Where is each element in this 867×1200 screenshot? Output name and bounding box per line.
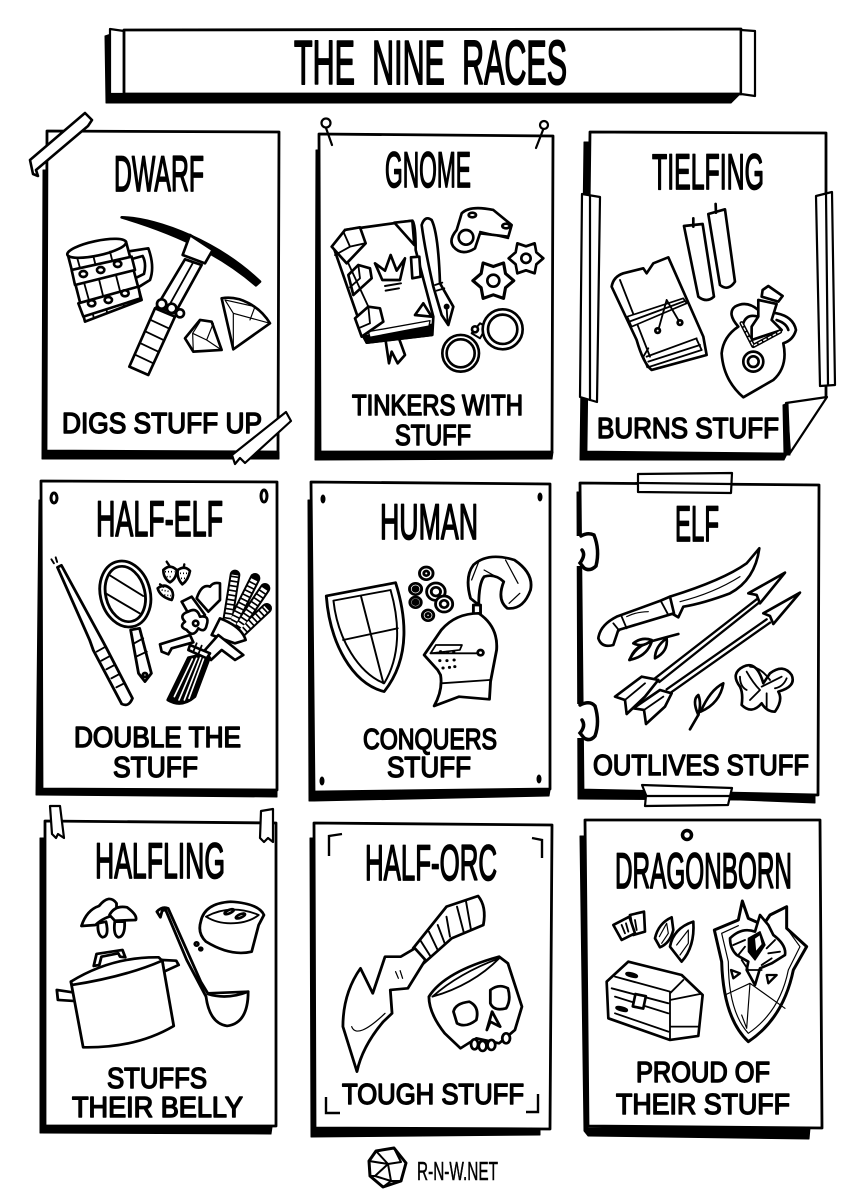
caption: stuffs their belly: STUFFS (107, 1063, 207, 1095)
icon: d20 (369, 1148, 406, 1187)
icon: dragon shield (714, 901, 807, 1042)
icons: runes, gems, chest (607, 912, 703, 1040)
caption: double the stuff: DOUBLE THE (74, 722, 241, 754)
caption: conquers stuff: STUFF (387, 752, 471, 784)
icons: book, pen (332, 218, 453, 363)
panel: tielfing (580, 132, 835, 460)
icons: wand, mirror (51, 557, 157, 705)
caption: double the stuff: STUFF (113, 752, 198, 784)
caption: stuffs their belly: THEIR BELLY (72, 1092, 243, 1124)
pin: left (322, 118, 332, 145)
logo: d20 and site name (369, 1148, 498, 1187)
caption: tough stuff: TOUGH STUFF (342, 1079, 524, 1111)
tabs (50, 806, 273, 842)
tape strips (580, 192, 835, 402)
hole (682, 830, 692, 840)
panel: gnome: GNOME (385, 142, 471, 198)
heading: half-elf: HALF-ELF (96, 491, 223, 547)
caption: digs stuff up: DIGS STUFF UP (62, 408, 262, 440)
heading: human: HUMAN (380, 494, 478, 550)
caption: conquers stuff: CONQUERS (363, 724, 497, 756)
panel: dwarf: DWARF (114, 146, 204, 202)
icons: mushrooms, pot, ladle, bowl (57, 899, 264, 1047)
puzzle notches (576, 534, 598, 740)
icons: blade, skull (343, 896, 522, 1072)
icons: shield, coins, helmet (326, 557, 531, 706)
icons: journal, candles, potion (612, 204, 796, 397)
tape: top left (30, 113, 92, 176)
heading: halfling: HALFLING (95, 833, 225, 889)
caption: tinkers with stuff: STUFF (395, 420, 471, 452)
caption: conquers stuff (363, 724, 497, 784)
corner brackets (326, 834, 542, 1113)
panel: dwarf (30, 113, 291, 464)
panel: halfling (40, 806, 276, 1134)
caption: stuffs their belly (72, 1063, 243, 1124)
icons: strawberries, bouquet (158, 562, 267, 703)
dots (320, 493, 542, 785)
panel: gnome (315, 118, 553, 460)
pin: right (536, 121, 548, 148)
caption: proud of their stuff (616, 1057, 790, 1121)
icons: loupe, gears, glasses (442, 208, 543, 372)
panel: elf: ELF (675, 496, 719, 552)
heading: half-orc: HALF-ORC (365, 835, 497, 891)
caption: proud of their stuff: THEIR STUFF (616, 1089, 790, 1121)
panel: human (308, 482, 550, 801)
caption: double the stuff (74, 722, 241, 784)
title banner: THE NINE RACES (294, 29, 567, 98)
panel: half-orc (310, 823, 552, 1137)
caption: outlives stuff: OUTLIVES STUFF (593, 750, 809, 782)
panel: dragonborn (580, 820, 822, 1139)
caption: tinkers with stuff (352, 390, 523, 452)
icons: knife, arrows, leaves, knot (598, 548, 800, 729)
holes (51, 490, 267, 503)
caption: tinkers with stuff: TINKERS WITH (352, 390, 523, 422)
panel: elf (576, 473, 819, 806)
tape: bottom (642, 785, 732, 806)
icons: mug, pickaxe, gems (66, 217, 270, 375)
title banner (105, 29, 755, 103)
tape: top (638, 473, 732, 493)
tape: bottom right (232, 412, 291, 464)
site name: R-N-W.NET (417, 1156, 498, 1186)
caption: proud of their stuff: PROUD OF (636, 1057, 770, 1089)
caption: burns stuff: BURNS STUFF (597, 413, 779, 445)
panel: half-elf (36, 481, 277, 797)
folded corner (786, 397, 827, 453)
